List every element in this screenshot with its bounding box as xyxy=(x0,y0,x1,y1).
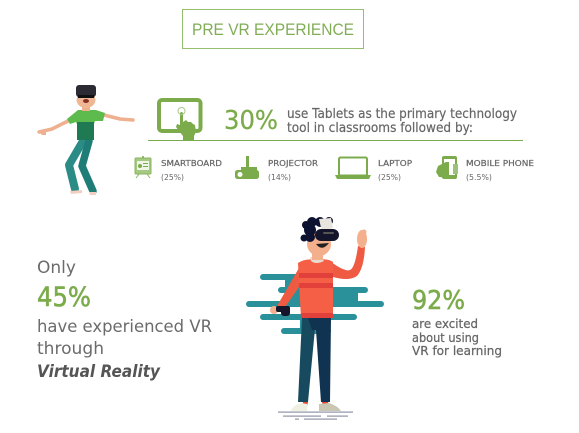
text: 92% block: 92% xyxy=(412,286,465,316)
text: 45% block xyxy=(37,258,212,382)
illustration: large man in VR headset xyxy=(246,217,384,420)
text: 92% block xyxy=(412,286,502,358)
label: mobile phone: MOBILE PHONE xyxy=(466,159,534,168)
label: smartboard xyxy=(161,159,222,182)
text: 45% block: 45% xyxy=(37,282,91,313)
label: mobile phone xyxy=(466,159,534,182)
text: 45% block: through xyxy=(37,339,104,359)
label: laptop: LAPTOP xyxy=(378,159,412,168)
text: 92% block: are excited xyxy=(412,316,478,331)
icon: laptop xyxy=(335,158,371,179)
text: 92% block: about using xyxy=(412,330,479,345)
text: tablets statement: tool in classrooms followed by: xyxy=(287,121,473,136)
label: smartboard: SMARTBOARD xyxy=(161,159,222,168)
label: mobile phone: (5.5%) xyxy=(466,173,492,182)
text: tablets statement: use Tablets as the primary technology xyxy=(287,107,517,122)
label: projector xyxy=(268,159,318,182)
text: 45% block: have experienced VR xyxy=(37,317,212,337)
text: 92% block: VR for learning xyxy=(412,343,502,358)
text: 45% block: Only xyxy=(37,258,76,278)
icon: tablet with hand xyxy=(159,100,200,140)
illustration: small man in VR headset xyxy=(38,85,133,195)
label: smartboard: (25%) xyxy=(161,173,184,182)
icon: projector xyxy=(235,156,259,179)
label: laptop: (25%) xyxy=(378,173,401,182)
icon: smartboard xyxy=(135,156,151,178)
title: PRE VR EXPERIENCE xyxy=(192,20,354,39)
icon: mobile phone xyxy=(436,156,458,179)
text: 45% block: Virtual Reality xyxy=(37,362,161,382)
stat: 30%: 30% xyxy=(224,106,278,136)
title xyxy=(182,10,364,48)
text: tablets statement xyxy=(287,107,517,136)
label: projector: (14%) xyxy=(268,173,291,182)
label: laptop xyxy=(378,159,412,182)
label: projector: PROJECTOR xyxy=(268,159,318,168)
